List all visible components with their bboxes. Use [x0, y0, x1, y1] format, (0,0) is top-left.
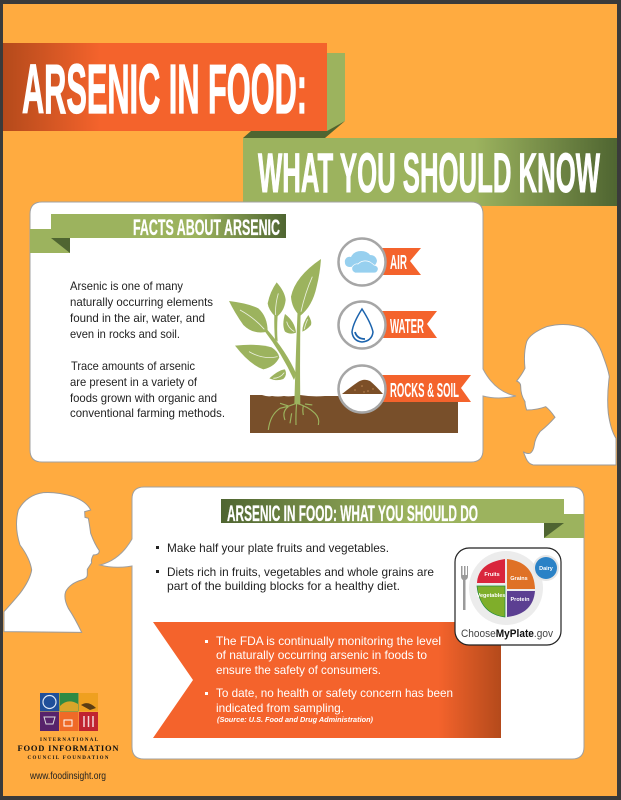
- title ribbon shadow: [243, 53, 345, 138]
- callout: FDA monitoring: [153, 622, 501, 738]
- callout: FDA monitoring: ensure the safety of consumers.: [216, 663, 381, 677]
- text block: advice list: [156, 541, 434, 593]
- logo text: [18, 738, 119, 761]
- logo mosaic: [40, 693, 98, 731]
- heading ribbon: FACTS ABOUT ARSENIC: [133, 215, 280, 240]
- callout: FDA monitoring: of naturally occurring arsenic in foods to: [216, 648, 427, 662]
- icon: water: WATER: [390, 316, 424, 338]
- text block: facts: [70, 279, 225, 420]
- callout: FDA monitoring: indicated from sampling.: [216, 701, 344, 715]
- text block: advice list: Make half your plate fruits and vegetables.: [167, 541, 389, 555]
- callout: FDA monitoring: (Source: U.S. Food and Drug Administration): [217, 715, 373, 724]
- icon: rocks and soil: [338, 366, 471, 412]
- text block: facts: Trace amounts of arsenic: [71, 359, 195, 373]
- icon: ChooseMyPlate: [455, 548, 561, 645]
- logo text: INTERNATIONAL: [40, 738, 99, 743]
- title ribbon: arsenic in food: [3, 43, 327, 131]
- text block: advice list: Diets rich in fruits, vegetables and whole grains are: [167, 565, 434, 579]
- title: [3, 43, 617, 206]
- speech bubble: [100, 487, 584, 759]
- icon: ChooseMyPlate: Vegetables: [477, 593, 505, 599]
- callout: FDA monitoring: The FDA is continually monitoring the level: [216, 634, 441, 648]
- silhouette: woman: [517, 325, 616, 465]
- icon: ChooseMyPlate: Protein: [511, 597, 530, 603]
- icon: ChooseMyPlate: Fruits: [484, 572, 500, 578]
- icon: water: [338, 302, 437, 348]
- icon: ChooseMyPlate: Grains: [510, 576, 528, 582]
- icon: ChooseMyPlate: Dairy: [539, 566, 554, 572]
- callout: FDA monitoring: To date, no health or safety concern has been: [216, 686, 453, 700]
- logo text: FOOD INFORMATION: [18, 743, 119, 753]
- icon: ChooseMyPlate: ChooseMyPlate.gov: [461, 628, 553, 640]
- logo text: COUNCIL FOUNDATION: [28, 756, 109, 761]
- text block: facts: even in rocks and soil.: [70, 327, 180, 341]
- text block: facts: naturally occurring elements: [70, 295, 213, 309]
- silhouette: man: [4, 492, 99, 632]
- text block: facts: Arsenic is one of many: [70, 279, 183, 293]
- panel: facts about arsenic: [30, 202, 516, 462]
- text block: facts: are present in a variety of: [70, 375, 198, 389]
- heading ribbon: [30, 214, 286, 253]
- icon: air: [338, 238, 421, 286]
- panel: what you should do: [100, 487, 584, 759]
- icon: air: AIR: [390, 252, 407, 274]
- icon: rocks and soil: ROCKS & SOIL: [390, 380, 459, 402]
- website: www.foodinsight.org: [29, 771, 106, 782]
- heading ribbon: [221, 499, 584, 538]
- text block: advice list: part of the building blocks for a healthy diet.: [167, 579, 400, 593]
- logo: International Food Information Council Foundation: [18, 693, 119, 782]
- illustration: plant and soil: [229, 259, 458, 433]
- text block: facts: found in the air, water, and: [70, 311, 205, 325]
- text block: facts: foods grown with organic and: [70, 391, 217, 405]
- speech bubble: [30, 202, 516, 462]
- text block: facts: conventional farming methods.: [70, 406, 225, 420]
